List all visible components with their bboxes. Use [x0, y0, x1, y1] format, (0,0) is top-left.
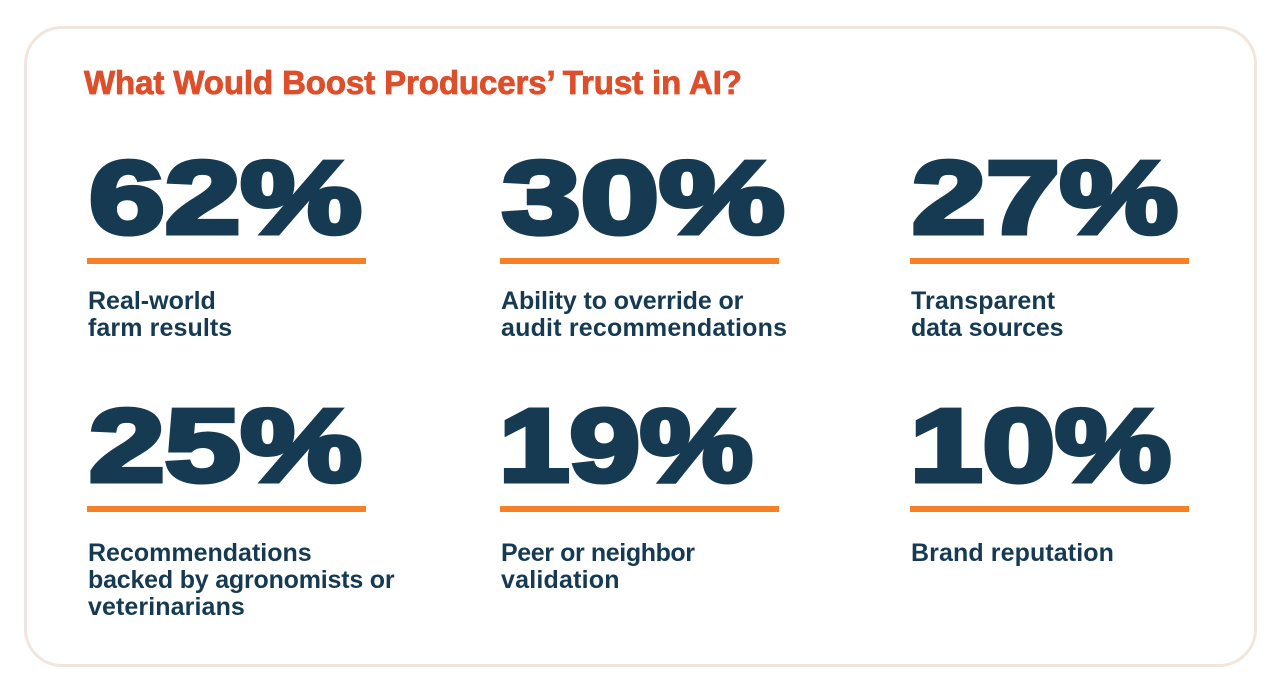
stat: 27% transparent data sources: Transparent [911, 287, 1055, 315]
stat: 25% recommendations backed [87, 388, 394, 621]
stat: 19% peer validation [499, 388, 779, 594]
stat: 30% ability to override [500, 140, 787, 342]
stat: 10% brand reputation: Brand reputation [911, 539, 1114, 567]
stat: 27% transparent data sources: data sources [911, 314, 1063, 342]
stat: 30% ability to override: audit recommendations [501, 314, 787, 342]
stat: 62% real-world farm results: Real-world [88, 287, 216, 315]
stat: 25% recommendations backed: Recommendations [88, 539, 312, 567]
stat: 19% peer validation: validation [501, 566, 620, 594]
title: What Would Boost Producers’ Trust in AI? [84, 64, 742, 101]
stat: 62% real-world farm results: 62% [89, 140, 362, 255]
stat: 25% recommendations backed: backed by agronomists or [88, 566, 394, 594]
stat: 30% ability to override: Ability to override or [501, 287, 743, 315]
stat: 62% real-world farm results [87, 140, 366, 342]
stat: 25% recommendations backed: 25% [89, 388, 362, 503]
stat: 10% brand reputation [910, 388, 1189, 567]
stat: 19% peer validation: 19% [499, 388, 753, 503]
stat: 10% brand reputation: 10% [910, 388, 1171, 503]
stat: 27% transparent data sources [910, 140, 1189, 342]
stat: 62% real-world farm results: farm results [88, 314, 232, 342]
stat: 30% ability to override: 30% [502, 140, 785, 255]
stat: 19% peer validation: Peer or neighbor [501, 539, 695, 567]
text: veterinarians [88, 593, 245, 621]
stat: 27% transparent data sources: 27% [912, 140, 1178, 255]
